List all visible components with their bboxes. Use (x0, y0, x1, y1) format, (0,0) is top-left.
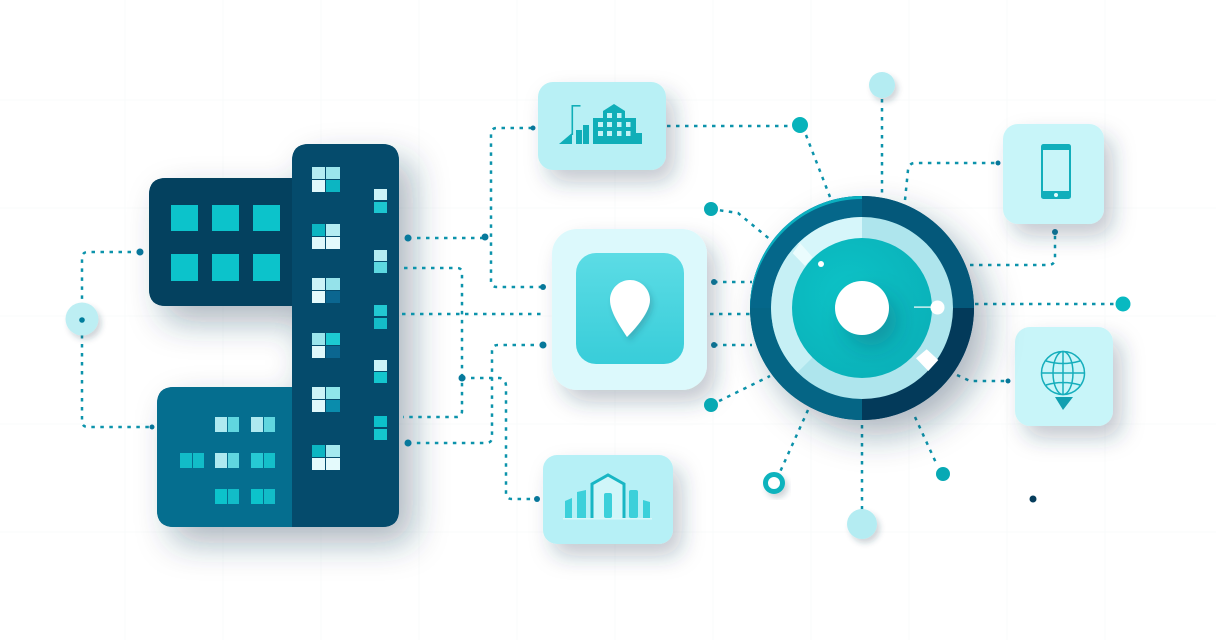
tower windows: left column (312, 167, 340, 470)
node: top right of centre teal dot (792, 117, 808, 133)
building complex (149, 144, 399, 527)
building: upper left block (149, 178, 293, 306)
node: right teal dot (1116, 296, 1130, 312)
inner icon tile (576, 253, 684, 364)
icon: arch with bars (563, 475, 652, 520)
building: tall tower (292, 144, 399, 527)
node: top light circle (869, 72, 895, 98)
connector lines: tower to centre card (402, 126, 546, 502)
node: small navy dot (1030, 496, 1036, 502)
icon: globe with marker (1042, 352, 1085, 410)
markers on the dial (818, 261, 944, 314)
node: bottom light circle (847, 509, 877, 539)
card: house and bars (543, 455, 673, 544)
node: lower left teal dot (704, 398, 718, 412)
outer ring segments (750, 196, 974, 420)
card: globe (1015, 327, 1113, 426)
connector lines: around the hub (667, 99, 1115, 510)
node: teal ring (766, 474, 782, 492)
card: factory and bars (538, 82, 666, 170)
building: lower left block (157, 387, 293, 527)
teal core (792, 238, 932, 378)
building silhouette with shadow (149, 144, 399, 527)
connector lines: left loop (82, 248, 154, 430)
node: left circle (66, 302, 98, 336)
white centre (835, 281, 889, 335)
card: centre location pin (552, 229, 707, 390)
node: upper left teal dot (704, 202, 718, 216)
icon: smartphone (1041, 144, 1071, 199)
hub: concentric dial (750, 196, 974, 420)
icon: buildings with bars (559, 104, 642, 144)
card: phone (1003, 124, 1104, 224)
node: lower right teal dot (936, 467, 950, 481)
icon: location pin (610, 280, 650, 337)
middle ring segments (771, 217, 953, 399)
tower windows: right column (374, 189, 387, 440)
